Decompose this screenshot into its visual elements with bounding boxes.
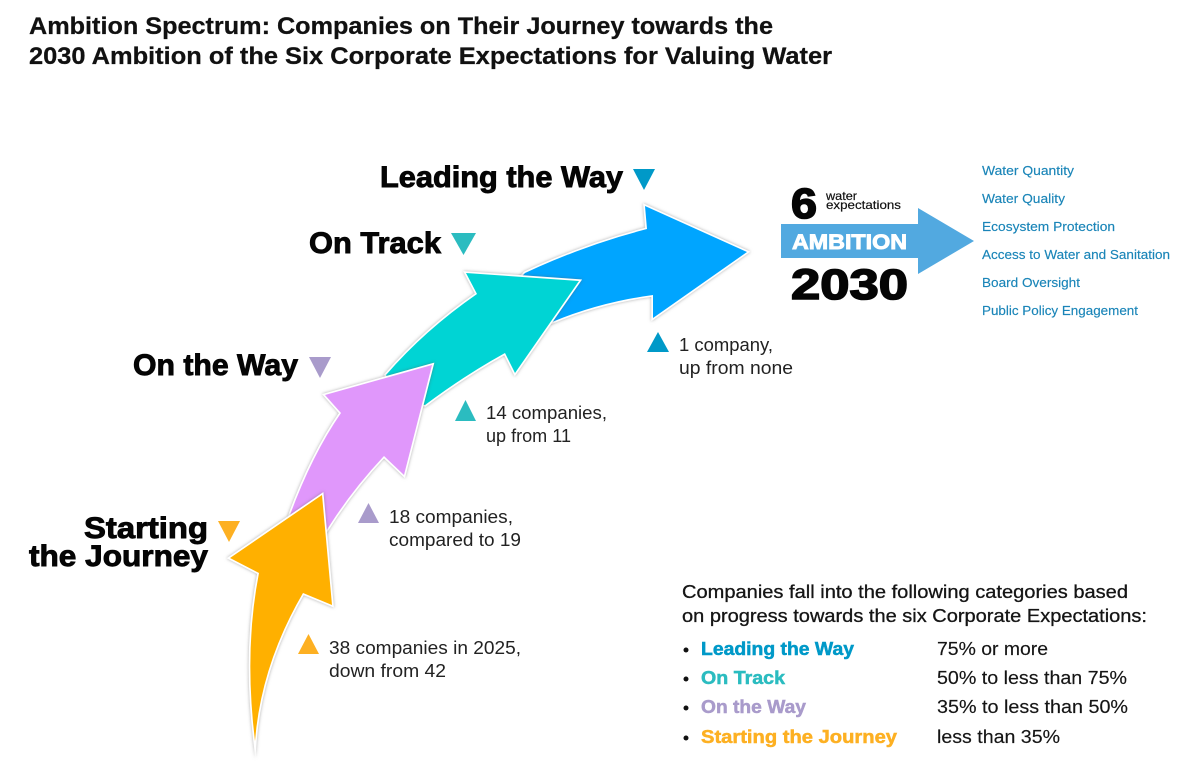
- ambition 2030 arrow block: [781, 180, 974, 309]
- list of six water expectations: [982, 163, 1170, 318]
- callout: 18 companies: [358, 503, 521, 550]
- callout: 18 companies: 18 companies,: [389, 507, 513, 527]
- callout: 1 company: [647, 332, 793, 378]
- legend heading: Companies fall into the following categories based: [682, 582, 1128, 602]
- callout: 38 companies: 38 companies in 2025,: [329, 638, 521, 658]
- legend row: starting the journey: [684, 726, 1060, 747]
- callout: 38 companies: down from 42: [329, 661, 446, 681]
- legend row: leading the way: [684, 638, 1048, 659]
- list of six water expectations: Board Oversight: [982, 275, 1080, 290]
- callout: 1 company: up from none: [679, 358, 793, 378]
- callout: 14 companies: 14 companies,: [486, 403, 607, 423]
- list of six water expectations: Access to Water and Sanitation: [982, 247, 1170, 262]
- legend panel: [682, 582, 1147, 747]
- title: 2030 Ambition of the Six Corporate Expectations for Valuing Water: [29, 43, 832, 70]
- callout: 18 companies: compared to 19: [389, 530, 521, 550]
- list of six water expectations: Water Quality: [982, 191, 1066, 206]
- legend row: on track: On Track: [701, 667, 786, 688]
- number 6: 6: [791, 180, 817, 228]
- water expectations: expectations: [826, 198, 901, 212]
- list of six water expectations: Ecosystem Protection: [982, 219, 1115, 234]
- legend row: leading the way: 75% or more: [937, 639, 1048, 659]
- arrow: on track (teal): [386, 273, 579, 405]
- title: [29, 13, 832, 70]
- label: on track: On Track: [309, 227, 441, 260]
- label: starting the journey: Starting: [84, 512, 208, 545]
- legend heading: [682, 582, 1147, 626]
- list of six water expectations: Water Quantity: [982, 163, 1075, 178]
- legend heading: on progress towards the six Corporate Expectations:: [682, 606, 1147, 626]
- arrow: on the way (purple): [290, 365, 432, 540]
- water expectations: water: [825, 189, 857, 203]
- list of six water expectations: Public Policy Engagement: [982, 303, 1138, 318]
- legend row: on track: [684, 667, 1127, 688]
- legend row: starting the journey: less than 35%: [937, 727, 1060, 747]
- callout: 14 companies: [455, 400, 607, 446]
- label: starting the journey: [29, 512, 240, 573]
- title: Ambition Spectrum: Companies on Their Journey towards the: [29, 13, 773, 40]
- callout: 38 companies: [298, 634, 521, 681]
- year 2030: 2030: [791, 261, 908, 309]
- ambition label: AMBITION: [792, 231, 907, 254]
- arrow: starting the journey (orange): [230, 495, 332, 741]
- label: leading the way: Leading the Way: [380, 161, 623, 194]
- callout: 1 company: 1 company,: [679, 335, 773, 355]
- legend row: on the way: 35% to less than 50%: [937, 697, 1128, 717]
- legend row: on the way: [684, 696, 1128, 717]
- arrow: leading the way (blue): [500, 206, 747, 322]
- legend row: on the way: On the Way: [701, 696, 807, 717]
- legend row: starting the journey: Starting the Journey: [701, 726, 898, 747]
- label: starting the journey: the Journey: [29, 540, 208, 573]
- water expectations: [825, 189, 901, 212]
- label: on the way: On the Way: [133, 349, 298, 382]
- legend row: on track: 50% to less than 75%: [937, 668, 1127, 688]
- icon: ambition arrow: [781, 208, 974, 274]
- legend row: leading the way: Leading the Way: [701, 638, 855, 659]
- callout: 14 companies: up from 11: [486, 426, 571, 446]
